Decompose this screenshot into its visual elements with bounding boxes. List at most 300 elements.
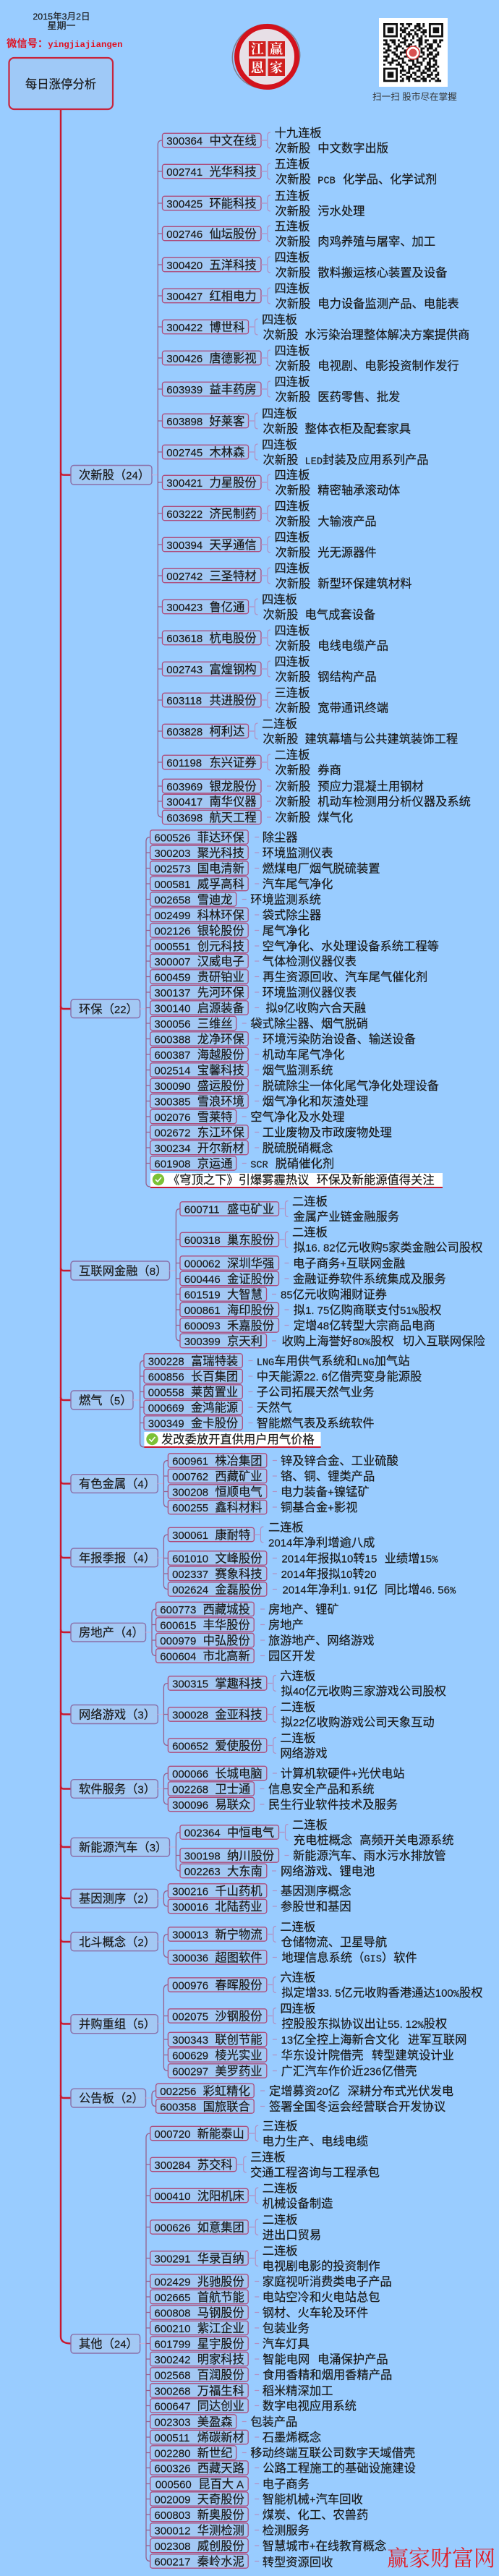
stock: 600387 海越股份: 600387: [154, 1049, 190, 1062]
stock: 000762 西藏矿业: 西藏矿业: [215, 1470, 263, 1483]
stock: 002745 木林森: 次新股: [263, 454, 298, 467]
stock: 300291 华录百纳: 二连板: [263, 2245, 298, 2258]
stock: 002672 东江环保: 东江环保: [197, 1127, 244, 1140]
stock: 000558 莱茵置业: 莱茵置业: [191, 1386, 238, 1399]
callout: 穹顶之下: [150, 1173, 443, 1187]
stock: 002745 木林森: 封装及应用系列产品: [323, 454, 429, 467]
stock: 300228 富瑞特装: 300228: [148, 1355, 184, 1368]
section node: 有色金属（4）: [61, 1475, 163, 1493]
stock: 002743 富煌钢构: 002743: [166, 664, 202, 676]
stock: 603828 柯利达: 柯利达: [210, 725, 244, 738]
stock: 000720 新能泰山: 电力生产、电线电缆: [263, 2136, 368, 2149]
stock: 002514 宝馨科技: 宝馨科技: [197, 1065, 244, 1078]
stock: 603618 杭电股份: 603618: [166, 633, 202, 645]
stock: 603939 益丰药房: 益丰药房: [210, 383, 257, 396]
stock: 603939 益丰药房: 四连板: [275, 375, 310, 388]
stock: 300426 唐德影视: 电视剧、电影投资制作发行: [317, 360, 459, 373]
wechat id: 微信号：yingjiajiangen: [7, 37, 123, 50]
stock: 600711 盛屯矿业: 盛屯矿业: [227, 1203, 274, 1216]
stock: 002268 卫士通: 002268: [172, 1783, 208, 1796]
stock: 603222 济民制药: 四连板: [275, 500, 310, 513]
stock: 300228 富瑞特装: LNG车用供气系统和LNG加气站: [257, 1355, 410, 1368]
stock: 300291 华录百纳: [150, 2245, 380, 2273]
stock: 600217 秦岭水泥: 转型资源回收: [263, 2556, 333, 2569]
stock: 300315 掌趣科技: 300315: [172, 1678, 208, 1691]
section node: 有色金属（4）: 有色金属（4）: [79, 1478, 155, 1491]
watermark: 赢家财富网: [387, 2541, 495, 2572]
stock: 600297 美罗药业: [168, 2064, 417, 2078]
stock: 002499 科林环保: 科林环保: [197, 909, 244, 922]
stock: 000066 长城电脑: 长城电脑: [215, 1767, 263, 1780]
stock: 000551 创元科技: 创元科技: [197, 940, 244, 953]
stock: 300096 易联众: 300096: [172, 1799, 208, 1812]
stock: 600388 龙净环保: 环境污染防治设备、输送设备: [263, 1033, 416, 1046]
stock: 002743 富煌钢构: 钢结构产品: [317, 671, 377, 684]
stock: 300422 博世科: 博世科: [210, 321, 244, 334]
stock: 600961 株冶集团: 600961: [172, 1455, 208, 1468]
stock: 300090 盛运股份: 盛运股份: [197, 1080, 244, 1093]
connector: 房地产 children: [152, 1609, 156, 1656]
stock: 002429 兆驰股份: 002429: [154, 2277, 190, 2288]
stock: 603618 杭电股份: 四连板: [275, 624, 310, 637]
stock: 000560 昆百大A: 电子商务: [263, 2478, 310, 2491]
stock: 002665 首航节能: [150, 2290, 380, 2304]
stock: 600459 贵研铂业: 再生资源回收、汽车尾气催化剂: [263, 971, 427, 984]
stock: 002364 中恒电气: 二连板: [292, 1819, 328, 1832]
stock: 000560 昆百大A: 000560: [155, 2479, 192, 2491]
stock: 300426 唐德影视: 次新股: [275, 360, 310, 373]
stock: 300421 力星股份: 300421: [166, 477, 202, 490]
stock: 603698 航天工程: 煤气化: [317, 811, 353, 824]
stock: 603118 共进股份: [162, 686, 388, 715]
stock: 600808 马钢股份: 钢材、火车轮及环件: [263, 2307, 368, 2320]
stock: 000762 西藏矿业: 000762: [172, 1471, 208, 1483]
stock: 600629 棱光实业: 600629: [172, 2050, 208, 2063]
stock: 603118 共进股份: 603118: [166, 695, 202, 707]
date heading: 2015年3月2日: [33, 12, 90, 22]
section node: 次新股（24）: [61, 466, 158, 485]
icon: logo seal: 恩: [251, 58, 265, 77]
stock: 300427 红相电力: 四连板: [275, 282, 310, 295]
stock: 601519 大智慧: 601519: [184, 1289, 221, 1302]
stock: 000066 长城电脑: [168, 1766, 405, 1780]
stock: 300427 红相电力: 次新股: [275, 298, 310, 311]
stock: 002337 赛象科技: 2014年报拟10转20: [281, 1568, 377, 1581]
stock: 603939 益丰药房: [162, 375, 400, 404]
stock: 600255 鑫科材料: 600255: [172, 1502, 208, 1514]
stock: 000511 烯碳新材: [150, 2430, 321, 2444]
stock: 002256 彩虹精化: 002256: [160, 2086, 196, 2098]
stock: 603118 共进股份: 共进股份: [210, 694, 257, 707]
stock: 600093 禾嘉股份: 禾嘉股份: [227, 1319, 274, 1332]
stock: 300364 中文在线: 300364: [166, 135, 202, 148]
stock: 603698 航天工程: [162, 810, 353, 824]
stock: 300242 明家科技: 智能电网: [263, 2353, 310, 2366]
stock: 002009 天奇股份: 智能机械+汽车回收: [263, 2494, 363, 2507]
section node: 互联网金融（8）: [61, 1261, 176, 1280]
stock: 300028 金亚科技: 二连板: [280, 1701, 315, 1714]
stock: 603222 济民制药: 济民制药: [210, 508, 257, 521]
stock: 000861 海印股份: [180, 1302, 441, 1318]
stock: 600217 秦岭水泥: 600217: [154, 2556, 190, 2569]
stock: 600358 国旅联合: 签署全国冬运会经营联合开发协议: [269, 2100, 445, 2113]
stock: 000976 春晖股份: 春晖股份: [215, 1979, 263, 1992]
section node: 北斗概念（2）: 北斗概念（2）: [79, 1935, 155, 1949]
stock: 000626 如意集团: 如意集团: [197, 2220, 244, 2235]
stock: 603828 柯利达: 建筑幕墙与公共建筑装饰工程: [305, 733, 458, 746]
stock: 002364 中恒电气: 中恒电气: [227, 1827, 274, 1840]
stock: 300028 金亚科技: 300028: [172, 1710, 208, 1721]
stock: 002746 仙坛股份: [162, 220, 435, 249]
stock: 600629 棱光实业: [168, 2048, 454, 2063]
stock: 300394 天孚通信: 天孚通信: [210, 539, 257, 552]
stock: 600652 爱使股份: 网络游戏: [280, 1747, 328, 1760]
stock: 300284 苏交科: 三连板: [250, 2151, 286, 2164]
stock: 603698 航天工程: 次新股: [275, 811, 310, 824]
stock: 000979 中弘股份: 旅游地产、网络游戏: [268, 1634, 375, 1647]
connector: 有色金属 children: [163, 1461, 168, 1507]
stock: 002745 木林森: 木林森: [210, 446, 244, 459]
stock: 600318 巢东股份: 拟16. 82亿元收购5家类金融公司股权: [294, 1242, 482, 1255]
stock: 300420 五洋科技: 散料搬运核心装置及设备: [317, 267, 447, 280]
stock: 300422 博世科: 次新股: [263, 329, 298, 342]
stock: 002573 国电清新: 国电清新: [197, 862, 244, 875]
stock: 002308 威创股份: 002308: [154, 2541, 190, 2553]
stock: 601198 东兴证券: 601198: [166, 757, 202, 769]
section node: 其他（24）: [71, 2334, 146, 2353]
stock: 600318 巢东股份: [180, 1226, 482, 1255]
stock: 300228 富瑞特装: [144, 1354, 410, 1368]
stock: 300385 雪浪环境: 雪浪环境: [197, 1095, 244, 1108]
stock: 002429 兆驰股份: 兆驰股份: [197, 2275, 244, 2288]
stock: 300061 康耐特: 二连板: [268, 1521, 304, 1534]
stock: 600808 马钢股份: 600808: [154, 2307, 190, 2320]
stock: 300036 超图软件: 超图软件: [215, 1951, 263, 1964]
connector: 其他 children: [146, 2133, 150, 2562]
stock: 300422 博世科: [162, 313, 469, 342]
stock: 601519 大智慧: [180, 1287, 387, 1302]
stock: 002280 新世纪: [150, 2446, 415, 2460]
stock: 603828 柯利达: 二连板: [262, 717, 297, 730]
stock: 600459 贵研铂业: [150, 970, 427, 984]
section node: 年报季报（4）: 年报季报（4）: [79, 1552, 155, 1565]
stock: 300036 超图软件: 300036: [172, 1953, 208, 1964]
stock: 000062 深圳华强: 深圳华强: [227, 1257, 274, 1270]
stock: 600711 盛屯矿业: [180, 1195, 399, 1224]
stock: 300364 中文在线: 中文在线: [210, 135, 257, 148]
stock: 601010 文峰股份: 15%: [419, 1553, 438, 1566]
panel: 次新股: [61, 127, 471, 824]
stock: 300385 雪浪环境: [150, 1094, 368, 1108]
stock: 002280 新世纪: 002280: [154, 2447, 190, 2460]
stock: 300425 环能科技: 次新股: [275, 205, 310, 218]
stock: 300007 汉威电子: 汉威电子: [197, 955, 244, 968]
panel: 并购重组: [61, 1971, 483, 2078]
stock: 002624 金磊股份: 金磊股份: [215, 1584, 263, 1597]
QR caption: 扫一扫 股市尽在掌握: [372, 91, 457, 102]
connector: 公告板 children: [152, 2091, 156, 2106]
stock: 600387 海越股份: [150, 1047, 345, 1062]
stock: 002009 天奇股份: 002009: [154, 2494, 190, 2507]
section node: 软件服务（3）: 软件服务（3）: [79, 1783, 155, 1796]
stock: 300012 华测检测: 检测服务: [263, 2524, 310, 2537]
stock: 000720 新能泰山: [150, 2120, 368, 2149]
date heading: [33, 12, 90, 31]
stock: 000560 昆百大A: 昆百大: [198, 2478, 234, 2491]
stock: 002263 大东南: 002263: [184, 1866, 221, 1878]
stock: 603222 济民制药: [162, 500, 377, 529]
stock: 300268 万福生科: 万福生科: [197, 2385, 244, 2398]
stock: 601799 星宇股份: 601799: [154, 2339, 190, 2350]
stock: 002665 首航节能: 电站空冷和火电站总包: [263, 2291, 380, 2304]
stock: 300234 开尔新材: 脱硫脱硝概念: [263, 1141, 333, 1155]
stock: 000669 金鸿能源: 000669: [148, 1402, 184, 1415]
stock: 002263 大东南: 大东南: [227, 1865, 263, 1878]
stock: 600093 禾嘉股份: [180, 1318, 435, 1332]
stock: 000410 沈阳机床: 沈阳机床: [197, 2190, 244, 2203]
stock: 600856 长百集团: 长百集团: [191, 1370, 238, 1383]
stock: 603618 杭电股份: 次新股: [275, 640, 310, 653]
stock: 300137 先河环保: [150, 985, 357, 999]
stock: 000410 沈阳机床: 机械设备制造: [263, 2198, 333, 2211]
stock: 000626 如意集团: 进出口贸易: [263, 2229, 321, 2242]
stock: 002263 大东南: 网络游戏、锂电池: [281, 1864, 375, 1878]
stock: 600652 爱使股份: 600652: [172, 1740, 208, 1753]
stock: 603222 济民制药: 次新股: [275, 516, 310, 529]
stock: 002075 沙钢股份: [168, 2003, 447, 2031]
stock: 601908 京运通: [150, 1156, 334, 1172]
stock: 300417 南华仪器: 南华仪器: [210, 796, 257, 809]
stock: 002742 三圣特材: 三圣特材: [210, 570, 257, 583]
stock: 300056 三维丝: 袋式除尘器、烟气脱硝: [250, 1018, 368, 1031]
stock: 300061 康耐特: [168, 1521, 375, 1550]
stock: 600773 西藏城投: [156, 1602, 339, 1616]
stock: 300208 恒顺电气: 电力装备+镍锰矿: [281, 1485, 370, 1498]
callout: 穹顶之下: 环保及新能源值得关注: [317, 1174, 435, 1187]
stock: 300421 力星股份: [162, 469, 400, 498]
stock: 300140 启源装备: 300140: [154, 1002, 190, 1015]
stock: 300394 天孚通信: 四连板: [275, 531, 310, 544]
stock: 002746 仙坛股份: 仙坛股份: [210, 228, 257, 241]
panel: 软件服务: [61, 1766, 405, 1812]
stock: 600326 西藏天路: 600326: [154, 2463, 190, 2475]
stock: 600358 国旅联合: [156, 2099, 445, 2113]
stock: 000669 金鸿能源: 天然气: [257, 1402, 292, 1415]
icon: logo seal: [223, 15, 309, 98]
stock: 600210 紫江企业: 600210: [154, 2323, 190, 2335]
section node: 北斗概念（2）: [61, 1932, 163, 1951]
stock: 002658 雪迪龙: 雪迪龙: [197, 894, 233, 907]
stock: 300423 鲁亿通: 电气成套设备: [305, 609, 375, 622]
stock: 000976 春晖股份: 拟定增33. 5亿元收购香港通达100%股权: [281, 1987, 483, 2000]
stock: 600808 马钢股份: 马钢股份: [197, 2307, 244, 2320]
stock: 002126 银轮股份: 银轮股份: [197, 924, 244, 937]
stock: 603898 好莱客: 603898: [166, 416, 202, 428]
stock: 603828 柯利达: [162, 717, 458, 746]
stock: 002308 威创股份: 威创股份: [197, 2540, 244, 2553]
stock: 603828 柯利达: 603828: [166, 726, 202, 738]
stock: 600604 市北高新: 市北高新: [203, 1650, 250, 1663]
stock: 002741 光华科技: [162, 158, 437, 187]
connector: 环保 children: [146, 837, 150, 1187]
stock: 600773 西藏城投: 房地产、锂矿: [268, 1603, 339, 1616]
stock: 300016 北陆药业: 300016: [172, 1901, 208, 1914]
stock: 002665 首航节能: 首航节能: [197, 2291, 244, 2304]
stock: 601198 东兴证券: [162, 749, 341, 777]
stock: 603939 益丰药房: 次新股: [275, 391, 310, 404]
stock: 300315 掌趣科技: 六连板: [280, 1670, 315, 1683]
stock: 300198 纳川股份: 新能源汽车、雨水污水排放管: [293, 1850, 446, 1863]
stock: 300036 超图软件: 地理信息系统（GIS）软件: [281, 1951, 417, 1966]
root node: 每日涨停分析: [9, 58, 113, 109]
stock: 300013 新宁物流: 新宁物流: [215, 1928, 263, 1941]
stock: 002514 宝馨科技: 烟气监测系统: [263, 1065, 333, 1078]
stock: 603898 好莱客: 四连板: [262, 407, 297, 420]
stock: 601198 东兴证券: 东兴证券: [210, 756, 257, 769]
stock: 002499 科林环保: [150, 908, 321, 922]
connector: 基因测序 children: [163, 1890, 168, 1906]
stock: 002303 美盈森: 002303: [154, 2417, 190, 2428]
icon: QR code: [379, 18, 448, 87]
stock: 002268 卫士通: 卫士通: [215, 1783, 250, 1796]
stock: 300284 苏交科: 交通工程咨询与工程承包: [250, 2167, 380, 2180]
stock: 300028 金亚科技: [168, 1701, 435, 1729]
section node: 次新股（24）: 次新股（24）: [79, 469, 150, 482]
stock: 300385 雪浪环境: 300385: [154, 1096, 190, 1108]
section node: 年报季报（4）: [61, 1548, 163, 1567]
stock: 603969 银龙股份: 银龙股份: [210, 780, 257, 793]
stock: 600326 西藏天路: 西藏天路: [197, 2462, 244, 2475]
section node: 房地产（4）: [61, 1623, 152, 1642]
section node: 公告板（2）: [61, 2089, 152, 2107]
stock: 300012 华测检测: 华测检测: [197, 2524, 244, 2537]
stock: 000558 莱茵置业: 子公司拓展天然气业务: [257, 1386, 375, 1399]
stock: 002126 银轮股份: 尾气净化: [263, 924, 310, 937]
stock: 300291 华录百纳: 300291: [154, 2253, 190, 2265]
stock: 002076 雪莱特: [150, 1109, 344, 1124]
stock: 300096 易联众: 民生行业软件技术及服务: [268, 1799, 398, 1812]
stock: 002745 木林森: 002745: [166, 447, 202, 459]
stock: 000581 威孚高科: 汽车尾气净化: [263, 878, 333, 891]
stock: 002076 雪莱特: 002076: [154, 1112, 190, 1124]
stock: 300242 明家科技: 明家科技: [197, 2353, 244, 2366]
stock: 002746 仙坛股份: 五连板: [275, 220, 310, 233]
section node: 软件服务（3）: [61, 1780, 163, 1798]
stock: 300198 纳川股份: 纳川股份: [227, 1850, 274, 1863]
stock: 300291 华录百纳: 华录百纳: [197, 2252, 244, 2265]
stock: 300417 南华仪器: 次新股: [275, 796, 310, 809]
stock: 002280 新世纪: 移动终端互联公司数字天域借壳: [250, 2447, 415, 2460]
stock: 300417 南华仪器: [162, 794, 471, 809]
stock: 600318 巢东股份: 二连板: [292, 1226, 328, 1239]
stock: 300012 华测检测: 300012: [154, 2525, 190, 2537]
stock: 300399 京天利: 300399: [184, 1336, 221, 1348]
stock: 600604 市北高新: [156, 1649, 315, 1663]
stock: 600856 长百集团: [144, 1369, 422, 1383]
stock: 300425 环能科技: 300425: [166, 198, 202, 210]
stock: 002075 沙钢股份: 002075: [172, 2010, 208, 2023]
stock: 603969 银龙股份: 预应力混凝土用钢材: [317, 780, 424, 793]
stock: 600961 株冶集团: 锌及锌合金、工业硫酸: [281, 1455, 398, 1468]
trunk line: [61, 109, 71, 2343]
stock: 002364 中恒电气: 高频开关电源系统: [359, 1834, 454, 1847]
stock: 300013 新宁物流: [168, 1921, 387, 1949]
stock: 603698 航天工程: 603698: [166, 812, 202, 824]
stock: 300061 康耐特: 2014年净利增逾八成: [268, 1537, 375, 1550]
stock: 600647 同达创业: [150, 2399, 357, 2413]
connector: 次新股 children: [158, 140, 162, 817]
stock: 300421 力星股份: 次新股: [275, 485, 310, 498]
stock: 603118 共进股份: 宽带通讯终端: [317, 702, 388, 715]
stock: 603698 航天工程: 航天工程: [210, 811, 257, 824]
stock: 002573 国电清新: [150, 861, 380, 875]
stock: 600629 棱光实业: 棱光实业: [215, 2050, 263, 2063]
panel: 网络游戏: [61, 1670, 446, 1760]
section node: 环保（22）: [61, 999, 146, 1018]
stock: 000979 中弘股份: [156, 1633, 375, 1647]
stock: 600711 盛屯矿业: 二连板: [292, 1195, 328, 1208]
stock: 300422 博世科: 300422: [166, 322, 202, 334]
stock: 300216 千山药机: 千山药机: [215, 1885, 263, 1898]
stock: 600093 禾嘉股份: 600093: [184, 1321, 221, 1332]
section node: 网络游戏（3）: [61, 1705, 163, 1724]
stock: 000861 海印股份: 拟1. 75亿购商联支付51%股权: [294, 1304, 441, 1318]
stock: 300420 五洋科技: 五洋科技: [210, 259, 257, 272]
section node: 网络游戏（3）: 网络游戏（3）: [79, 1708, 155, 1721]
stock: 002009 天奇股份: [150, 2492, 363, 2507]
stock: 000720 新能泰山: 000720: [154, 2128, 190, 2141]
icon: logo seal: 赢: [270, 39, 283, 58]
stock: 000551 创元科技: [150, 939, 439, 953]
stock: 600446 金证股份: 金融证券软件系统集成及服务: [293, 1273, 446, 1286]
stock: 300420 五洋科技: 次新股: [275, 267, 310, 280]
stock: 002256 彩虹精化: [156, 2084, 453, 2098]
section node: 基因测序（2）: 基因测序（2）: [79, 1893, 155, 1906]
stock: 603618 杭电股份: 杭电股份: [210, 632, 257, 645]
stock: 002075 沙钢股份: 沙钢股份: [215, 2010, 263, 2023]
stock: 300203 聚光科技: [150, 845, 333, 860]
stock: 300242 明家科技: [150, 2352, 388, 2366]
section node: 基因测序（2）: [61, 1889, 163, 1908]
stock: 600803 新奥股份: 煤炭、化工、农兽药: [263, 2509, 368, 2522]
stock: 300208 恒顺电气: 恒顺电气: [215, 1485, 263, 1498]
stock: 300423 鲁亿通: [162, 593, 375, 622]
stock: 002743 富煌钢构: 富煌钢构: [210, 663, 257, 676]
section node: 燃气（5）: 燃气（5）: [79, 1394, 132, 1407]
section node: 互联网金融（8）: 互联网金融（8）: [79, 1265, 167, 1278]
stock: 600773 西藏城投: 西藏城投: [203, 1603, 250, 1616]
stock: 300394 天孚通信: [162, 531, 377, 560]
stock: 300343 联创节能: [168, 2032, 466, 2047]
stock: 300016 北陆药业: [168, 1899, 351, 1914]
stock: 000581 威孚高科: [150, 877, 333, 891]
stock: 300364 中文在线: 次新股: [275, 142, 310, 155]
stock: 002624 金磊股份: 同比增: [385, 1584, 419, 1597]
stock: 600446 金证股份: 600446: [184, 1274, 221, 1286]
stock: 002573 国电清新: 燃煤电厂烟气脱硫装置: [263, 862, 380, 875]
stock: 002672 东江环保: [150, 1125, 392, 1140]
stock: 600255 鑫科材料: [168, 1500, 357, 1514]
stock: 300349 金卡股份: 金卡股份: [191, 1417, 238, 1430]
panel: 公告板: [61, 2084, 453, 2113]
stock: 603898 好莱客: 整体衣柜及配套家具: [305, 423, 411, 436]
stock: 300007 汉威电子: 气体检测仪器仪表: [263, 955, 357, 968]
section node: 并购重组（5）: [61, 2015, 163, 2034]
stock: 002746 仙坛股份: 肉鸡养殖与屠宰、加工: [317, 236, 435, 249]
stock: 000410 沈阳机床: 000410: [154, 2191, 190, 2203]
stock: 603618 杭电股份: [162, 624, 388, 653]
stock: 603969 银龙股份: [162, 779, 424, 793]
